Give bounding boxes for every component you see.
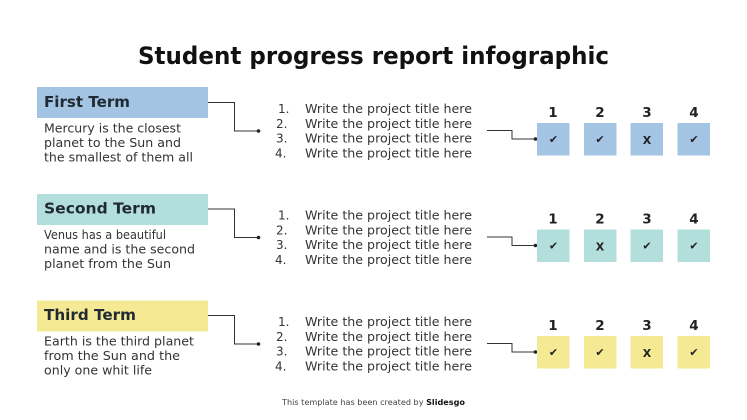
grades: third term: ✔ <box>595 346 605 359</box>
grades: third term: 1 <box>548 318 558 334</box>
grades: third term <box>537 318 710 368</box>
list: first term projects: Write the project title here <box>305 102 472 116</box>
list: third term projects: Write the project title here <box>305 344 472 358</box>
text block: second term description: name and is the second <box>44 242 195 256</box>
list: first term projects: 2. <box>276 117 287 131</box>
text block: third term description: from the Sun and the <box>44 349 180 363</box>
grades: third term: 4 <box>689 318 699 334</box>
grades: first term: ✔ <box>549 133 558 146</box>
grades: second term: 2 <box>595 212 605 228</box>
grades: second term <box>537 212 710 262</box>
list: second term projects: 1. <box>278 208 289 222</box>
panel: third term <box>37 300 710 378</box>
arrow: first term to projects <box>208 102 260 133</box>
grades: first term: 3 <box>642 105 652 121</box>
grades: second term: 1 <box>548 212 558 228</box>
list: first term projects: 1. <box>278 102 289 116</box>
list: second term projects: Write the project title here <box>305 253 472 267</box>
list: third term projects: 3. <box>276 344 287 358</box>
text block: third term description: only one whit life <box>44 364 152 378</box>
grades: third term: 2 <box>595 318 605 334</box>
list: first term projects: Write the project title here <box>305 146 472 160</box>
title: Student progress report infographic <box>138 42 609 70</box>
heading: first term <box>37 87 208 118</box>
grades: first term: ✔ <box>689 133 699 146</box>
list: second term projects: Write the project title here <box>305 224 472 238</box>
footer credit: This template has been created by Slidesgo <box>281 398 465 407</box>
heading: second term <box>37 194 208 225</box>
heading: third term: Third Term <box>44 306 136 324</box>
grades: first term <box>537 105 710 156</box>
list: second term projects: 4. <box>275 253 286 267</box>
arrow: second term to grades <box>487 237 537 247</box>
heading: first term: First Term <box>44 93 130 111</box>
list: third term projects <box>275 315 472 374</box>
list: second term projects <box>275 208 472 267</box>
grades: second term: ✔ <box>689 240 699 252</box>
grades: second term: 3 <box>642 212 652 228</box>
panel: second term <box>37 194 710 271</box>
grades: second term: ✔ <box>642 240 652 252</box>
text block: third term description <box>44 334 194 378</box>
grades: first term: 4 <box>689 105 699 121</box>
grades: first term: 1 <box>548 105 558 121</box>
text block: second term description: planet from the Sun <box>44 257 171 271</box>
grades: third term: 3 <box>642 318 652 334</box>
list: second term projects: 2. <box>276 224 287 238</box>
arrow: first term to grades <box>487 130 537 141</box>
grades: first term: X <box>643 134 652 147</box>
grades: third term: ✔ <box>549 346 558 359</box>
list: third term projects: Write the project title here <box>305 315 472 329</box>
list: first term projects: 4. <box>275 146 286 160</box>
arrow: second term to projects <box>208 209 260 239</box>
list: third term projects: Write the project title here <box>305 360 472 374</box>
text block: second term description <box>44 228 195 271</box>
grades: third term: X <box>643 347 652 360</box>
grades: second term: X <box>596 240 605 254</box>
grades: second term: 4 <box>689 212 699 228</box>
list: first term projects: Write the project title here <box>305 117 472 131</box>
grades: first term: 2 <box>595 105 605 121</box>
list: first term projects: Write the project title here <box>305 132 472 146</box>
heading: third term <box>37 300 208 332</box>
list: third term projects: 1. <box>278 315 289 329</box>
heading: second term: Second Term <box>44 200 156 218</box>
grades: first term: ✔ <box>595 133 605 146</box>
list: first term projects: 3. <box>276 132 287 146</box>
list: second term projects: Write the project title here <box>305 208 472 222</box>
text block: first term description <box>44 122 193 164</box>
text block: first term description: planet to the Sun and <box>44 136 181 150</box>
text block: first term description: Mercury is the closest <box>44 122 181 136</box>
grades: third term: ✔ <box>689 346 699 359</box>
list: third term projects: 2. <box>276 330 287 344</box>
panel: first term <box>37 87 710 164</box>
text block: first term description: the smallest of them all <box>44 150 193 164</box>
list: third term projects: Write the project title here <box>305 330 472 344</box>
list: first term projects <box>275 102 472 160</box>
text block: third term description: Earth is the third planet <box>44 334 194 348</box>
text block: second term description: Venus has a beautiful <box>44 228 166 242</box>
list: second term projects: Write the project title here <box>305 238 472 252</box>
list: second term projects: 3. <box>276 238 287 252</box>
arrow: third term to projects <box>208 316 260 346</box>
list: third term projects: 4. <box>275 360 286 374</box>
grades: second term: ✔ <box>549 240 558 252</box>
arrow: third term to grades <box>487 344 537 354</box>
